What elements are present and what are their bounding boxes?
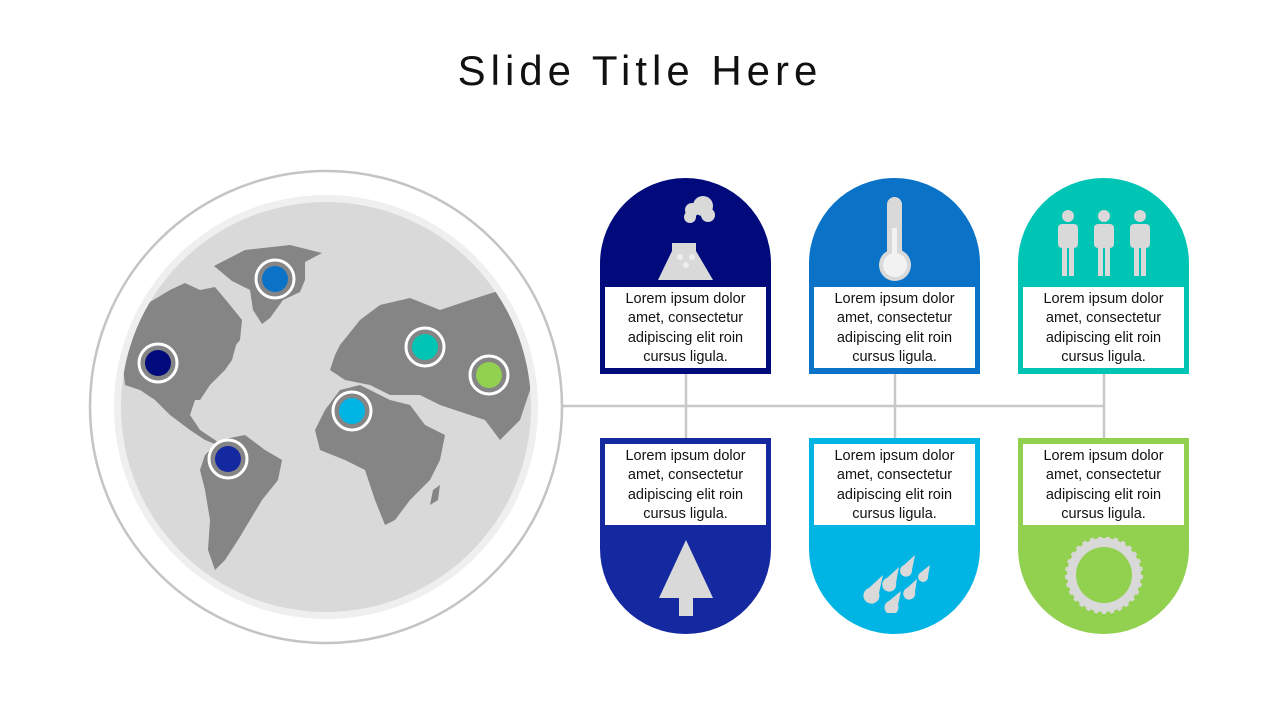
icon: tree — [659, 540, 713, 616]
card: tree: adipiscing elit roin — [628, 487, 743, 503]
card: people: Lorem ipsum dolor — [1043, 291, 1164, 307]
card: temperature — [809, 178, 980, 374]
card: tree — [600, 438, 771, 634]
card: tree: cursus ligula. — [643, 506, 728, 522]
map markers — [139, 260, 508, 478]
card: sun: Lorem ipsum dolor — [1043, 448, 1164, 464]
card: temperature: adipiscing elit roin — [837, 330, 952, 346]
card: temperature: amet, consectetur — [837, 310, 952, 326]
card: temperature: Lorem ipsum dolor — [834, 291, 955, 307]
card: rain: adipiscing elit roin — [837, 487, 952, 503]
card: tree: Lorem ipsum dolor — [625, 448, 746, 464]
card: rain: Lorem ipsum dolor — [834, 448, 955, 464]
card: rain: cursus ligula. — [852, 506, 937, 522]
card: factory: cursus ligula. — [643, 349, 728, 365]
card: factory: Lorem ipsum dolor — [625, 291, 746, 307]
card: tree: amet, consectetur — [628, 467, 743, 483]
icon: sun gear — [1065, 537, 1143, 614]
card: people: adipiscing elit roin — [1046, 330, 1161, 346]
card: people — [1018, 178, 1189, 374]
card: rain: amet, consectetur — [837, 467, 952, 483]
card: sun — [1018, 438, 1189, 634]
card: sun: adipiscing elit roin — [1046, 487, 1161, 503]
icon: people — [1058, 210, 1150, 276]
card: factory: adipiscing elit roin — [628, 330, 743, 346]
card: rain — [809, 438, 980, 634]
card: people: cursus ligula. — [1061, 349, 1146, 365]
card: sun: cursus ligula. — [1061, 506, 1146, 522]
icon: cooling tower — [658, 196, 715, 280]
icon: rain drops — [863, 555, 930, 613]
globe map — [88, 170, 564, 644]
title: Slide Title Here — [458, 47, 822, 94]
card: sun: amet, consectetur — [1046, 467, 1161, 483]
card: factory — [600, 178, 771, 374]
card: factory: amet, consectetur — [628, 310, 743, 326]
card: people: amet, consectetur — [1046, 310, 1161, 326]
card: temperature: cursus ligula. — [852, 349, 937, 365]
icon: thermometer — [879, 197, 911, 281]
